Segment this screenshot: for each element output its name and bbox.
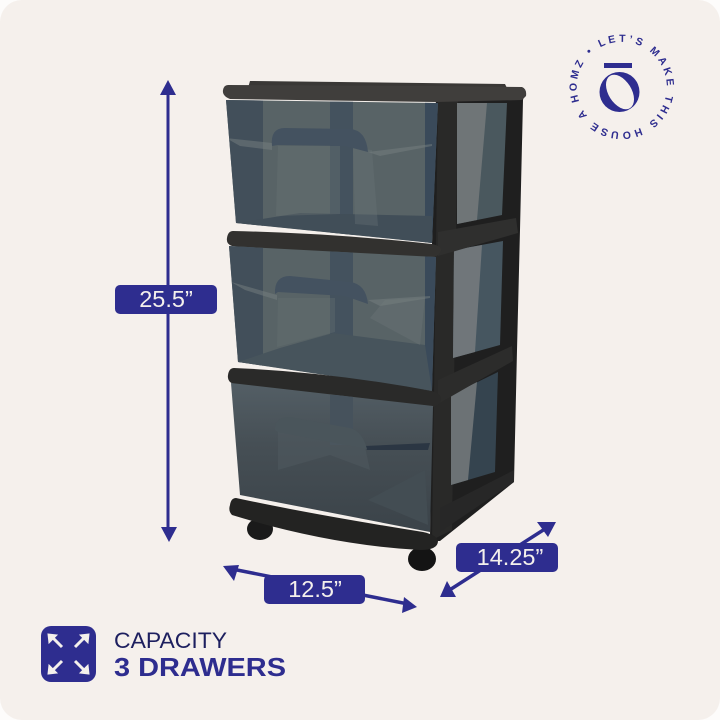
base rim [229, 498, 438, 550]
depth label: 14.25” [477, 544, 543, 570]
side window top [457, 103, 507, 224]
side window bottom [451, 372, 498, 485]
product photo: three drawer cart [220, 81, 526, 571]
frame cross bars [438, 218, 518, 256]
drawer 3 [231, 383, 433, 532]
capacity label: CAPACITY [114, 628, 227, 653]
logo mark [600, 63, 640, 114]
height label: 25.5” [139, 286, 193, 312]
top rim [223, 85, 526, 102]
circular slogan: • LET’S MAKE THIS HOUSE A HOMZ [569, 34, 674, 139]
height arrow [160, 80, 177, 542]
capacity icon [41, 626, 96, 682]
depth arrow [440, 522, 556, 597]
front post [432, 100, 458, 540]
drawer 2 lower rim [228, 368, 441, 408]
width label [264, 575, 365, 604]
drawer 1 [226, 100, 438, 243]
side frame [430, 92, 525, 541]
drawer 1 lower rim [227, 231, 441, 258]
wheels [247, 518, 436, 571]
capacity value: 3 DRAWERS [114, 652, 286, 682]
side window middle [453, 241, 503, 358]
depth label [456, 543, 558, 572]
logo badge [569, 34, 674, 139]
width arrow [223, 565, 417, 613]
top lid strip [248, 81, 507, 88]
width label: 12.5” [288, 576, 342, 602]
height label [115, 285, 217, 314]
drawer 2 [229, 246, 436, 391]
